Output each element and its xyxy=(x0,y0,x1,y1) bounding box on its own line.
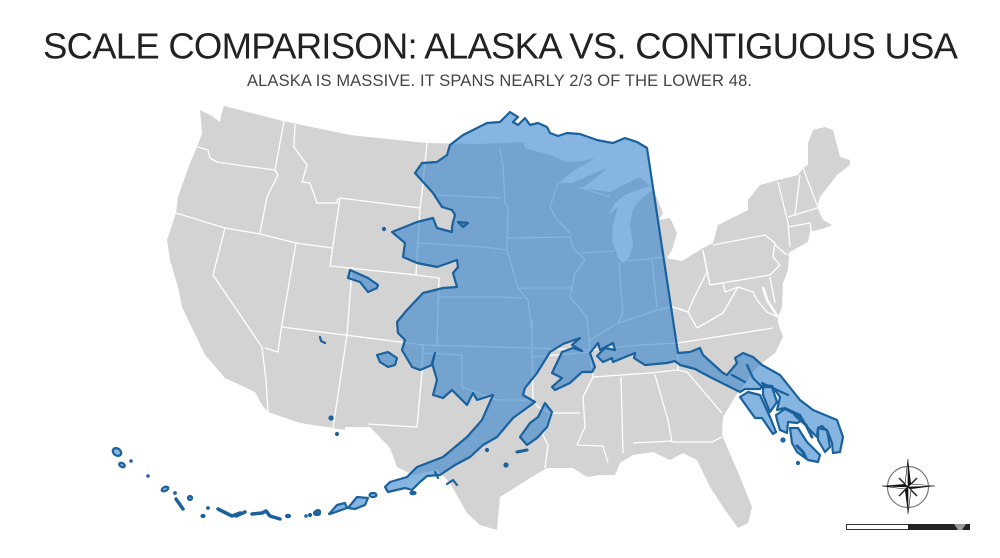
icon: compass rose xyxy=(882,459,935,514)
panhandle islands xyxy=(732,365,830,464)
title: SCALE COMPARISON: ALASKA VS. CONTIGUOUS USA xyxy=(43,26,959,66)
landmass: lower 48 xyxy=(167,106,850,530)
subtitle: ALASKA IS MASSIVE. IT SPANS NEARLY 2/3 OF THE LOWER 48. xyxy=(247,72,752,90)
kodiak island xyxy=(520,403,552,445)
map: contiguous USA xyxy=(167,106,850,530)
western islands xyxy=(320,222,508,466)
scale bar xyxy=(846,524,970,530)
aleutian islands xyxy=(111,447,457,519)
alaska overlay xyxy=(111,112,843,519)
alaska mainland and panhandle xyxy=(385,112,843,492)
state borders xyxy=(176,121,817,468)
